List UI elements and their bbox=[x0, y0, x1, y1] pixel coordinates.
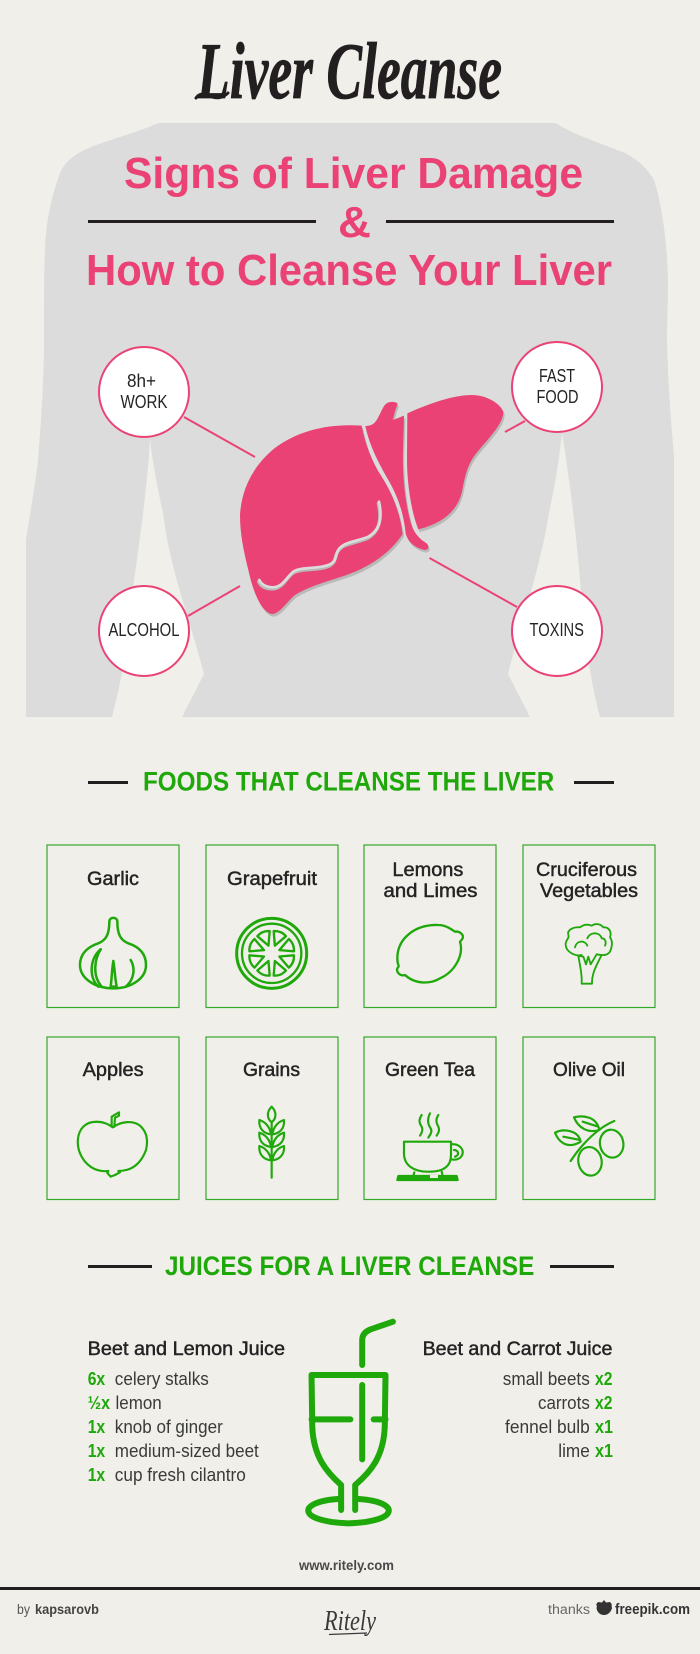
liver bbox=[240, 395, 505, 617]
recipe: beet and lemon juice: ½x bbox=[88, 1393, 110, 1413]
icon: freepik mascot bbox=[596, 1600, 612, 1615]
connector: alcohol bbox=[188, 586, 240, 616]
callout: alcohol: ALCOHOL bbox=[108, 620, 180, 640]
website: www.ritely.com bbox=[298, 1558, 394, 1573]
icon: juice glass bbox=[308, 1322, 393, 1523]
recipe: beet and lemon juice: 1x bbox=[88, 1441, 105, 1461]
recipe: beet and carrot juice: fennel bulb bbox=[505, 1417, 590, 1437]
recipe: beet and carrot juice: x2 bbox=[595, 1393, 612, 1413]
card: cruciferous vegetables bbox=[523, 845, 655, 1008]
recipe: beet and carrot juice: x2 bbox=[595, 1369, 612, 1389]
footer: thanks freepik: thanks bbox=[548, 1602, 590, 1617]
recipe: beet and carrot juice bbox=[423, 1339, 613, 1461]
recipe: beet and lemon juice: 1x bbox=[88, 1465, 105, 1485]
recipe: beet and lemon juice: lemon bbox=[116, 1393, 162, 1413]
recipe: beet and lemon juice: medium-sized beet bbox=[115, 1441, 259, 1461]
recipe: beet and carrot juice: x1 bbox=[595, 1417, 613, 1437]
torso silhouette bbox=[26, 123, 674, 717]
card: green tea bbox=[364, 1037, 496, 1200]
recipe: beet and carrot juice: small beets bbox=[503, 1369, 590, 1389]
callout: toxins: TOXINS bbox=[530, 620, 584, 640]
card: cruciferous vegetables: Cruciferous bbox=[536, 860, 637, 881]
footer: credit: kapsarovb bbox=[35, 1602, 99, 1617]
recipe: beet and carrot juice: lime bbox=[558, 1441, 590, 1461]
icon: tea cup bbox=[397, 1113, 463, 1180]
recipe: beet and lemon juice: knob of ginger bbox=[115, 1417, 223, 1437]
card: lemons and limes bbox=[364, 845, 496, 1008]
heading: juices section: JUICES FOR A LIVER CLEANSE bbox=[165, 1251, 534, 1281]
right rule bbox=[386, 220, 614, 223]
recipe: beet and lemon juice: 1x bbox=[88, 1417, 105, 1437]
card: olive oil: Olive Oil bbox=[553, 1060, 625, 1081]
callout: 8h+ work bbox=[99, 347, 189, 437]
connector: work bbox=[184, 417, 255, 457]
recipe: beet and lemon juice bbox=[88, 1339, 285, 1485]
card: lemons and limes: Lemons bbox=[392, 860, 463, 881]
footer rule bbox=[0, 1587, 700, 1590]
recipe: beet and lemon juice: cup fresh cilantro bbox=[115, 1465, 246, 1485]
card: garlic: Garlic bbox=[87, 869, 139, 890]
recipe: beet and carrot juice: carrots bbox=[538, 1393, 590, 1413]
card: lemons and limes: and Limes bbox=[384, 881, 478, 902]
recipe: beet and carrot juice: x1 bbox=[595, 1441, 613, 1461]
callout: 8h+ work: WORK bbox=[120, 392, 168, 412]
card: grains bbox=[206, 1037, 338, 1200]
recipe: beet and lemon juice: 6x bbox=[88, 1369, 105, 1389]
callout: toxins bbox=[512, 586, 602, 676]
footer: thanks freepik: freepik.com bbox=[615, 1601, 690, 1618]
card: grapefruit bbox=[206, 845, 338, 1008]
card: grains: Grains bbox=[243, 1060, 300, 1081]
callout: fast food: FOOD bbox=[536, 387, 578, 407]
icon: grapefruit bbox=[237, 918, 307, 988]
recipe: beet and lemon juice: Beet and Lemon Juice bbox=[88, 1339, 285, 1360]
icon: apple bbox=[78, 1112, 147, 1177]
footer: thanks freepik bbox=[548, 1600, 690, 1618]
title bbox=[196, 28, 502, 116]
card: green tea: Green Tea bbox=[385, 1060, 475, 1081]
callout: fast food bbox=[512, 342, 602, 432]
heading: how to cleanse: How to Cleanse Your Liver bbox=[86, 246, 612, 295]
heading: signs of liver damage: Signs of Liver Damage bbox=[124, 149, 583, 198]
connector: toxins bbox=[430, 558, 517, 607]
footer: ritely logo: Ritely bbox=[323, 1606, 376, 1637]
panel: food cards bbox=[47, 845, 655, 1200]
title: Liver Cleanse bbox=[196, 28, 502, 116]
recipe: beet and carrot juice: Beet and Carrot Juice bbox=[423, 1339, 612, 1360]
icon: broccoli bbox=[566, 924, 612, 984]
recipe: beet and lemon juice: celery stalks bbox=[115, 1369, 209, 1389]
icon: lemon bbox=[397, 925, 463, 982]
callout: alcohol bbox=[99, 586, 189, 676]
connector: fast food bbox=[505, 421, 525, 432]
callout: 8h+ work: 8h+ bbox=[127, 371, 156, 391]
ampersand: & bbox=[338, 198, 371, 247]
card: apples bbox=[47, 1037, 179, 1200]
card: apples: Apples bbox=[83, 1060, 144, 1081]
callout: fast food: FAST bbox=[539, 366, 575, 386]
icon: olive branch bbox=[555, 1116, 626, 1177]
card: olive oil bbox=[523, 1037, 655, 1200]
icon: garlic bbox=[80, 918, 146, 988]
card: grapefruit: Grapefruit bbox=[227, 869, 318, 890]
heading: foods section: FOODS THAT CLEANSE THE LIVER bbox=[143, 767, 554, 797]
panel: torso hero bbox=[26, 123, 674, 717]
card: cruciferous vegetables: Vegetables bbox=[540, 881, 638, 902]
left rule bbox=[88, 220, 316, 223]
card: garlic bbox=[47, 845, 179, 1008]
footer: credit: by bbox=[17, 1602, 30, 1617]
icon: wheat bbox=[259, 1107, 284, 1178]
